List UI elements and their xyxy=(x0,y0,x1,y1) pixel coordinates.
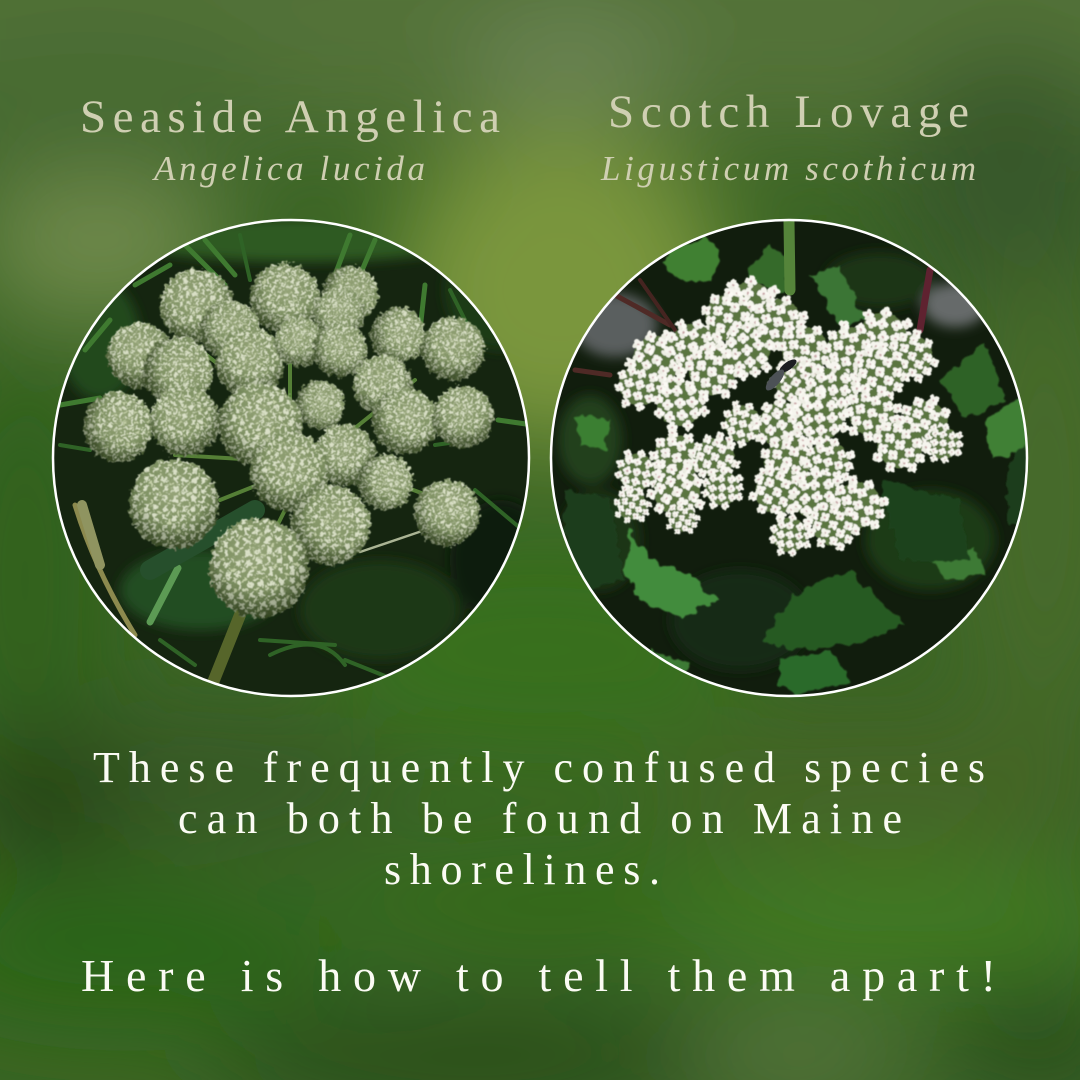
insect xyxy=(766,359,796,390)
body text: species description: shorelines. xyxy=(384,845,660,894)
subheading: Angelica lucida: Angelica lucida xyxy=(152,149,425,188)
photo: Scotch Lovage flower cluster xyxy=(548,218,1030,700)
subheading: Ligusticum scothicum: Ligusticum scothicum xyxy=(600,149,976,188)
call to action: Here is how to tell them apart! xyxy=(81,950,996,1001)
flower cluster xyxy=(605,270,970,563)
body text: species description: can both be found on Maine xyxy=(178,794,902,843)
heading: Seaside Angelica: Seaside Angelica xyxy=(80,91,500,143)
body text: species description: These frequently confused species xyxy=(93,743,985,792)
body text: species description xyxy=(93,743,985,894)
heading: Scotch Lovage: Scotch Lovage xyxy=(608,86,969,138)
photo: Seaside Angelica flower heads xyxy=(50,218,555,700)
leaves xyxy=(565,235,1030,695)
